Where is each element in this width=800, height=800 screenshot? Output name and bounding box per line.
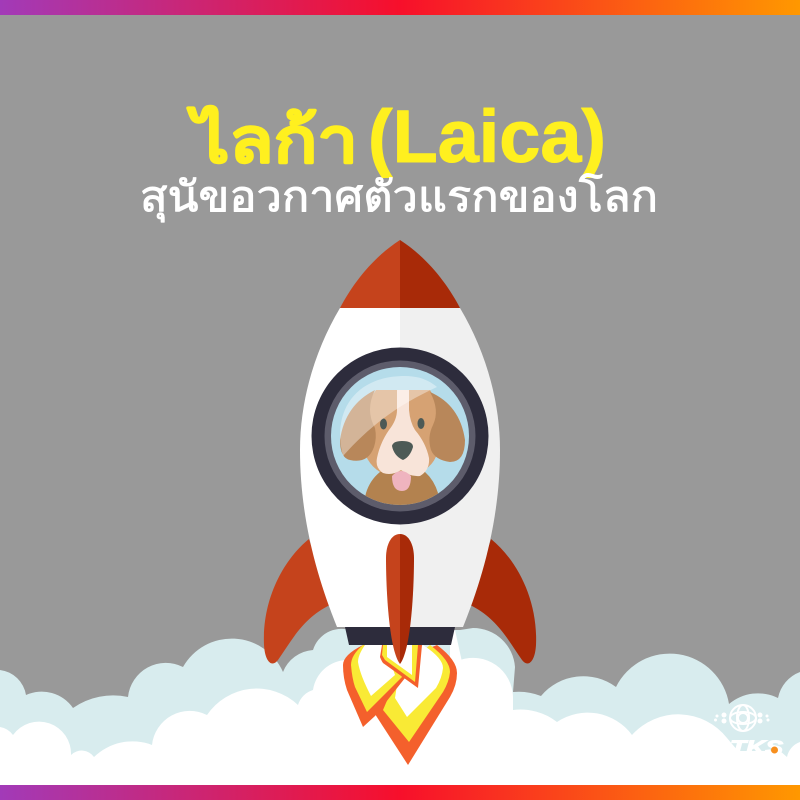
front cloud layer <box>0 658 800 785</box>
dog <box>340 390 465 510</box>
glass glare <box>340 376 437 456</box>
engine nozzle <box>345 627 455 645</box>
face stripe and muzzle <box>377 390 429 476</box>
rocket body left <box>300 308 400 627</box>
tongue <box>392 471 411 491</box>
cloud sliver beside nozzle <box>450 630 462 662</box>
title: ไลก้า <box>186 105 358 176</box>
left eye <box>380 418 387 430</box>
left ear <box>340 390 376 461</box>
small flame <box>380 645 422 688</box>
right ear <box>429 392 465 462</box>
logo orange dot <box>771 746 778 754</box>
title <box>186 95 606 178</box>
center fin <box>386 534 400 664</box>
logo emblem <box>730 705 756 731</box>
subtitle: สุนัขอวกาศตัวแรกของโลก <box>140 172 658 223</box>
porthole <box>312 348 488 524</box>
flames <box>343 645 457 765</box>
bottom gradient bar <box>0 785 800 800</box>
large flame <box>373 645 457 765</box>
logo dots <box>714 712 770 724</box>
back cloud layer <box>0 628 800 785</box>
dog body <box>365 472 438 505</box>
right eye <box>418 418 424 429</box>
title: (Laica) <box>368 95 606 178</box>
rocket nose right <box>400 240 460 308</box>
rocket body right <box>400 308 500 627</box>
rocket <box>264 240 536 765</box>
right fin <box>470 539 536 664</box>
top gradient bar <box>0 0 800 15</box>
dog head <box>366 390 436 472</box>
rocket nose left <box>340 240 400 308</box>
left flame <box>343 645 405 727</box>
logo text: TKS <box>730 738 783 759</box>
logo <box>714 705 783 759</box>
dog nose <box>392 441 413 460</box>
left fin <box>264 539 330 664</box>
